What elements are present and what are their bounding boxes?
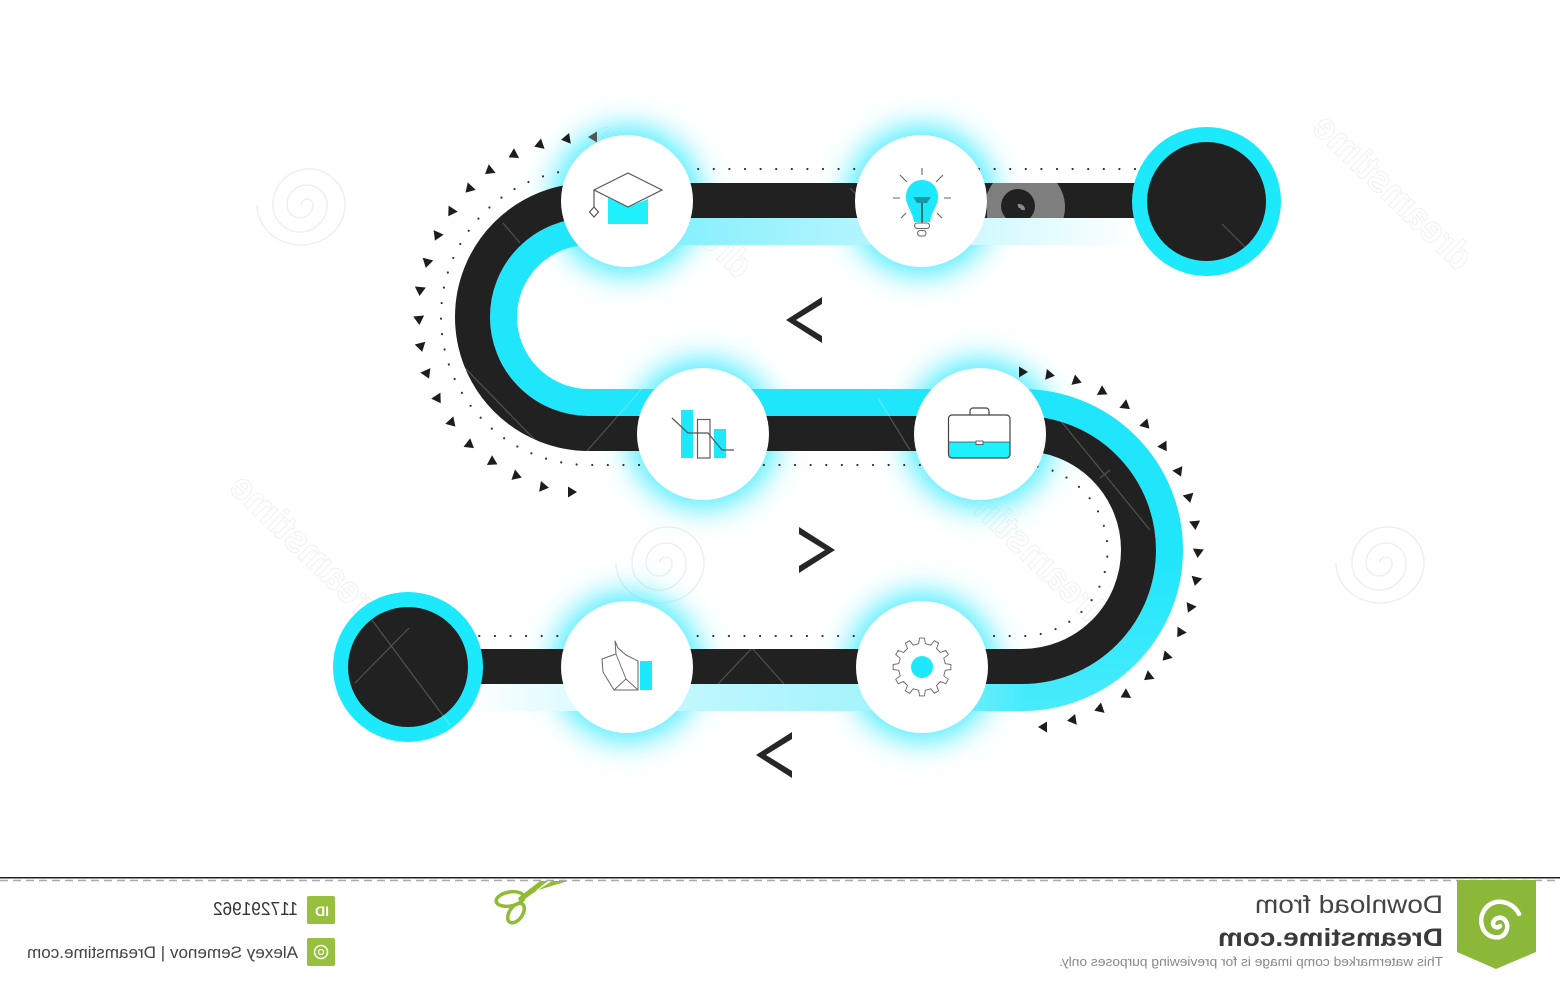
id badge: ID [315,903,329,919]
triangle markers: left arc [413,132,597,498]
download heading: Download from [1255,891,1443,919]
footer divider [0,877,1560,880]
end endpoint circle [333,592,483,742]
node 5: gear [856,601,988,733]
cyan road band [470,232,1170,698]
dotted guide lines [441,169,1135,636]
chevron arrow: upper left-pointing [786,297,822,343]
node 6: thumbs up [561,601,693,733]
author credit: Alexey Semenov | Dreamstime.com [27,943,298,962]
scissors icon [495,881,568,926]
chevron arrow: middle right-pointing [799,527,835,573]
id badge [307,896,335,924]
dreamstime ribbon logo [1457,880,1536,969]
chevron arrow: lower left-pointing [756,732,792,778]
watermark layer: dreamstime [221,466,398,638]
node 3: bar chart [637,368,769,500]
start endpoint circle [1132,127,1281,276]
watermark layer: dreamstime [1304,106,1481,278]
black road band [470,200,1150,666]
dreamstime heading: Dreamstime.com [1218,924,1443,952]
glow halos behind nodes [553,127,1054,741]
watermark layer: dreamstime [943,466,1120,638]
watermark spiral over road [987,183,1065,218]
image id number: 117291962 [213,899,298,919]
copyright badge [307,938,335,966]
watermark layer [221,106,1481,638]
node 2: light bulb [855,135,987,267]
node 4: briefcase [914,368,1046,500]
node 1: graduation cap [561,135,693,267]
triangle markers: right arc [1019,366,1204,732]
preview disclaimer: This watermarked comp image is for previewing purposes only. [1059,955,1443,969]
watermark layer: dreamstime [584,114,761,286]
faint watermark lines [355,188,1245,725]
